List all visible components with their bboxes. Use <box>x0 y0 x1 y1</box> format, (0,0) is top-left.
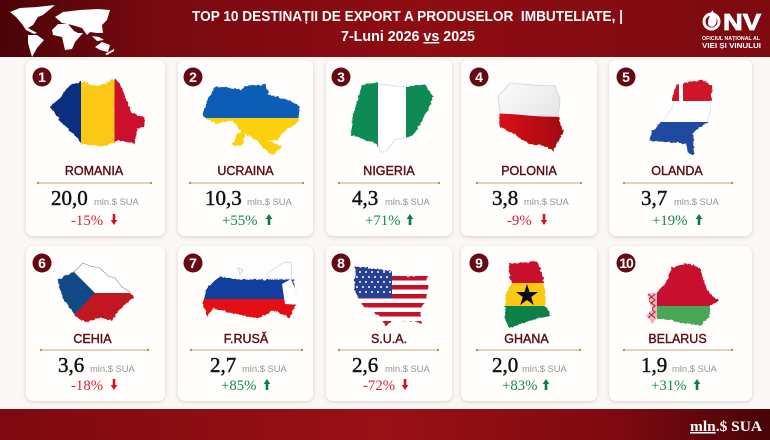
change: +83% <box>502 378 537 394</box>
value <box>58 353 136 377</box>
map: Cehia <box>58 262 134 322</box>
value <box>205 186 293 210</box>
rank badge 1: 1 <box>38 69 46 85</box>
value <box>492 186 570 210</box>
rank badge 10: 10 <box>619 255 634 271</box>
logo: VIEI ȘI VINULUI <box>702 43 761 50</box>
value: 2,6 <box>352 353 378 377</box>
value <box>492 353 568 377</box>
panel: card 7 F.Rusă <box>178 246 313 401</box>
map: Olanda <box>650 80 713 156</box>
rank badge 8 <box>332 254 350 272</box>
value <box>641 186 720 210</box>
rank badge 2: 2 <box>189 69 197 85</box>
rank badge 7 <box>184 254 202 272</box>
map: Polonia <box>498 82 564 152</box>
map: Ghana <box>504 261 550 328</box>
panel: card 5 Olanda <box>609 60 752 236</box>
map: F.Rusă <box>202 262 296 318</box>
change: +85% <box>221 378 256 394</box>
rank badge 5: 5 <box>622 69 630 85</box>
value: mln.$ SUA <box>674 196 720 207</box>
rank badge 9: 9 <box>475 255 483 271</box>
value: mln.$ SUA <box>385 196 431 207</box>
change: -18% <box>71 378 103 394</box>
logo <box>702 9 762 50</box>
rank badge 1 <box>32 68 52 86</box>
panel: card 3 Nigeria <box>326 60 452 236</box>
logo: NV <box>723 9 762 35</box>
map: Belarus <box>646 263 719 326</box>
value: 2,7 <box>210 353 236 377</box>
change: +31% <box>651 378 686 394</box>
change: -9% <box>507 213 532 229</box>
value: 3,7 <box>641 186 667 210</box>
country name: POLONIA <box>501 164 557 178</box>
country name: F.RUSĂ <box>224 331 269 346</box>
panel: card 10 Belarus <box>609 246 752 401</box>
value: 10,3 <box>205 186 242 210</box>
country name: NIGERIA <box>363 164 415 178</box>
value: mln.$ SUA <box>385 363 431 374</box>
map: Ucraina <box>202 84 300 156</box>
map: Romania <box>50 79 145 146</box>
value: 1,9 <box>641 353 667 377</box>
rank badge 4: 4 <box>475 69 483 85</box>
value: mln.$ SUA <box>90 363 136 374</box>
value: 2,0 <box>492 353 518 377</box>
title <box>192 9 623 45</box>
change: +55% <box>222 213 257 229</box>
panel: card 8 S.U.A. <box>326 246 452 401</box>
value: 4,3 <box>352 186 378 210</box>
rank badge 9 <box>470 254 488 272</box>
rank badge 4 <box>470 68 488 86</box>
country name: OLANDA <box>651 164 703 178</box>
value <box>51 186 140 210</box>
value: mln.$ SUA <box>524 196 570 207</box>
country name: UCRAINA <box>217 164 274 178</box>
rank badge 10 <box>616 254 636 272</box>
rank badge 5 <box>616 68 636 86</box>
change: +71% <box>365 213 400 229</box>
icon: world map <box>10 5 114 57</box>
value <box>352 186 431 210</box>
value: mln.$ SUA <box>242 363 288 374</box>
change <box>507 213 547 229</box>
value: mln.$ SUA <box>672 363 718 374</box>
change: +19% <box>652 213 687 229</box>
panel: card 6 Cehia <box>26 246 165 401</box>
country name: BELARUS <box>648 332 707 346</box>
title: TOP 10 DESTINAȚII DE EXPORT A PRODUSELOR IMBUTELIATE, | <box>192 9 623 25</box>
value: 3,6 <box>58 353 84 377</box>
rank badge 3: 3 <box>337 69 345 85</box>
panel: card 1 Romania <box>26 60 165 236</box>
value <box>352 353 431 377</box>
title: 7-Luni 2026 vs 2025 <box>341 29 475 45</box>
rank badge 2 <box>184 68 202 86</box>
header banner <box>0 0 770 57</box>
change: -72% <box>363 378 395 394</box>
country name: ROMANIA <box>65 164 124 178</box>
rank badge 7: 7 <box>189 255 197 271</box>
value: 20,0 <box>51 186 88 210</box>
rank badge 6: 6 <box>38 255 46 271</box>
rank badge 3 <box>332 68 350 86</box>
value: mln.$ SUA <box>247 196 293 207</box>
map: Nigeria <box>350 82 434 152</box>
country name: GHANA <box>504 332 549 346</box>
panel: card 4 Polonia <box>461 60 597 236</box>
rank badge 8: 8 <box>337 255 345 271</box>
unit note: mln.$ SUA <box>690 419 762 435</box>
rank badge 6 <box>32 254 52 272</box>
country name: S.U.A. <box>371 332 407 346</box>
map: S.U.A. <box>354 266 429 326</box>
value: mln.$ SUA <box>94 196 140 207</box>
value <box>210 353 288 377</box>
footer banner <box>0 409 770 440</box>
value: 3,8 <box>492 186 518 210</box>
country name: CEHIA <box>73 332 112 346</box>
change: -15% <box>71 213 103 229</box>
panel: card 9 Ghana <box>461 246 597 401</box>
change <box>71 213 117 229</box>
value <box>641 353 718 377</box>
logo: OFICIUL NAȚIONAL AL <box>702 36 761 42</box>
value: mln.$ SUA <box>522 363 568 374</box>
change <box>71 378 117 394</box>
panel: card 2 Ucraina <box>178 60 313 236</box>
